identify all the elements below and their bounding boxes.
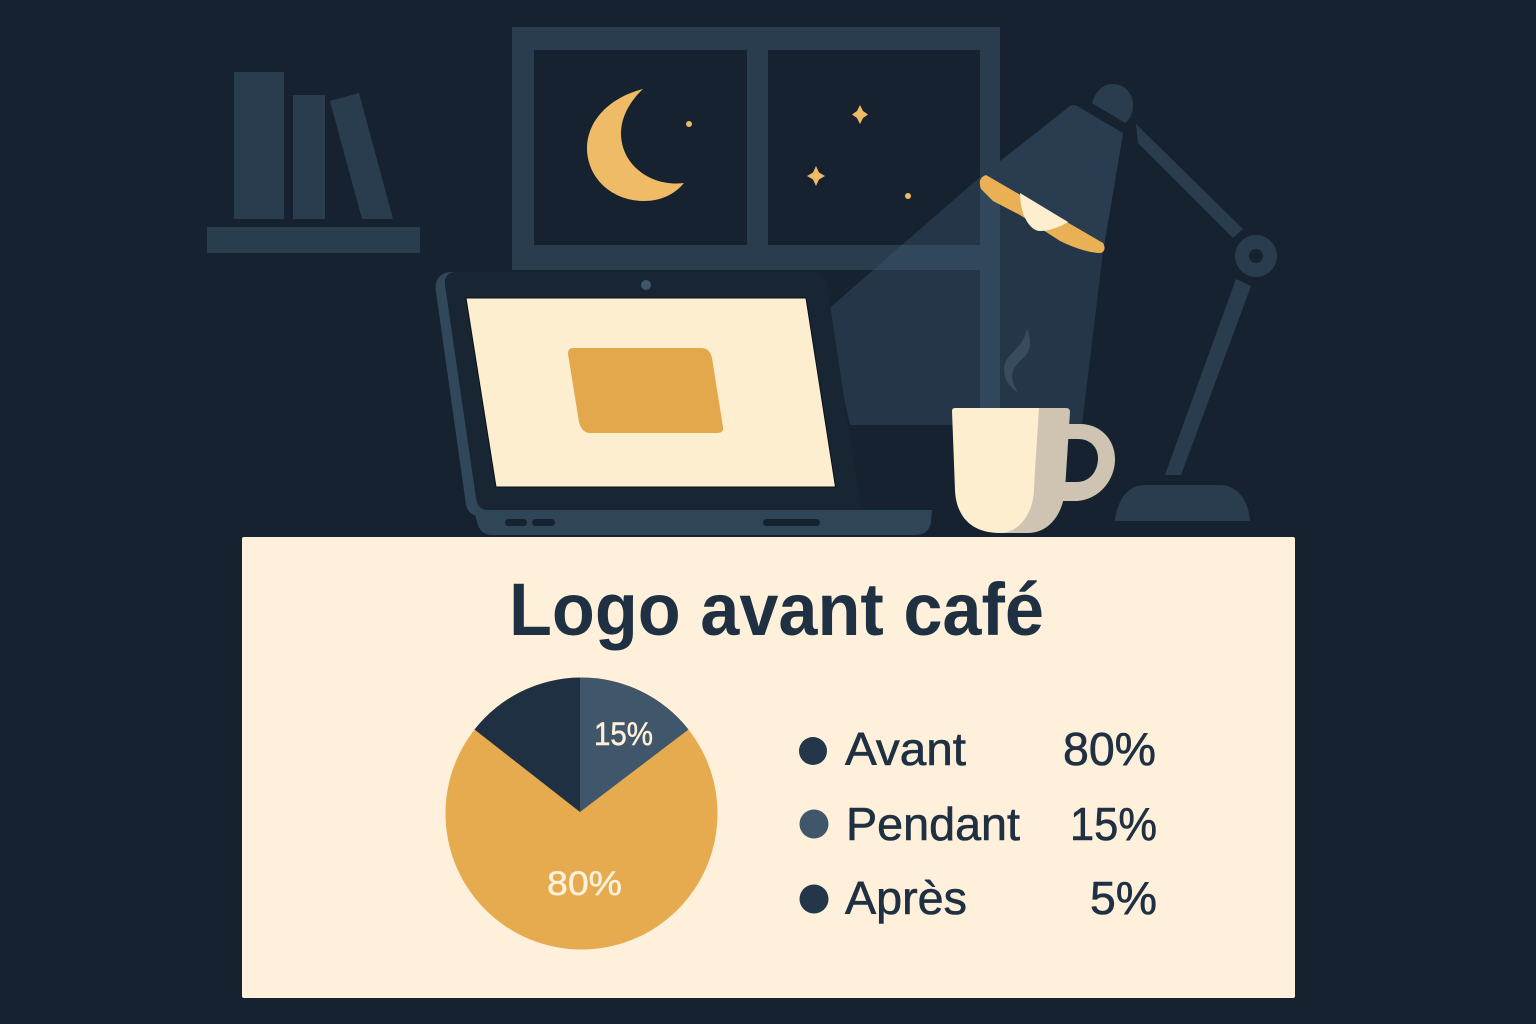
pie label 15%: 15% xyxy=(594,716,653,752)
lamp shade xyxy=(980,105,1123,252)
window xyxy=(512,27,1000,408)
lamp yellow rim xyxy=(980,175,1105,253)
laptop screen xyxy=(466,298,836,487)
pie slice: après xyxy=(474,678,580,812)
pie slice: pendant xyxy=(580,677,688,812)
pie chart xyxy=(446,677,718,950)
title: Logo avant café xyxy=(509,568,1044,651)
icon: desk lamp xyxy=(980,84,1282,521)
mug body xyxy=(952,408,1039,533)
legend row: Après: Après xyxy=(845,872,967,924)
laptop ports xyxy=(505,519,820,526)
icon: coffee mug xyxy=(952,408,1115,533)
mug body shadow xyxy=(1000,408,1070,533)
legend row: Pendant: Pendant xyxy=(846,798,1020,850)
legend row: Avant: 80% xyxy=(1063,723,1156,775)
laptop lid xyxy=(445,272,861,510)
laptop lid edge xyxy=(436,272,500,516)
lamp light beam xyxy=(825,133,1123,425)
legend row: Avant: Avant xyxy=(845,723,966,775)
laptop screen block xyxy=(568,348,723,433)
mug handle xyxy=(1058,424,1115,501)
legend row: Avant xyxy=(799,723,1156,775)
lamp base xyxy=(1115,485,1250,521)
icon: coffee steam xyxy=(1004,328,1030,392)
legend row: Pendant xyxy=(800,798,1157,850)
stars xyxy=(686,105,911,199)
legend row: Après: 5% xyxy=(1090,872,1157,924)
icon: laptop xyxy=(436,272,932,535)
lamp knob xyxy=(1092,84,1133,123)
lamp joint xyxy=(1230,230,1282,282)
pie label 80%: 80% xyxy=(547,865,622,903)
laptop base xyxy=(474,510,932,535)
icon: bookshelf xyxy=(207,72,420,253)
lamp bulb xyxy=(1020,193,1068,231)
icon: moon xyxy=(587,89,684,201)
legend row: Après xyxy=(800,872,1157,924)
panel: chart card xyxy=(242,537,1295,998)
legend xyxy=(799,723,1157,924)
legend row: Pendant: 15% xyxy=(1070,798,1157,850)
lamp lower arm xyxy=(1165,279,1251,475)
laptop webcam xyxy=(641,280,651,290)
lamp upper arm xyxy=(1136,124,1243,238)
